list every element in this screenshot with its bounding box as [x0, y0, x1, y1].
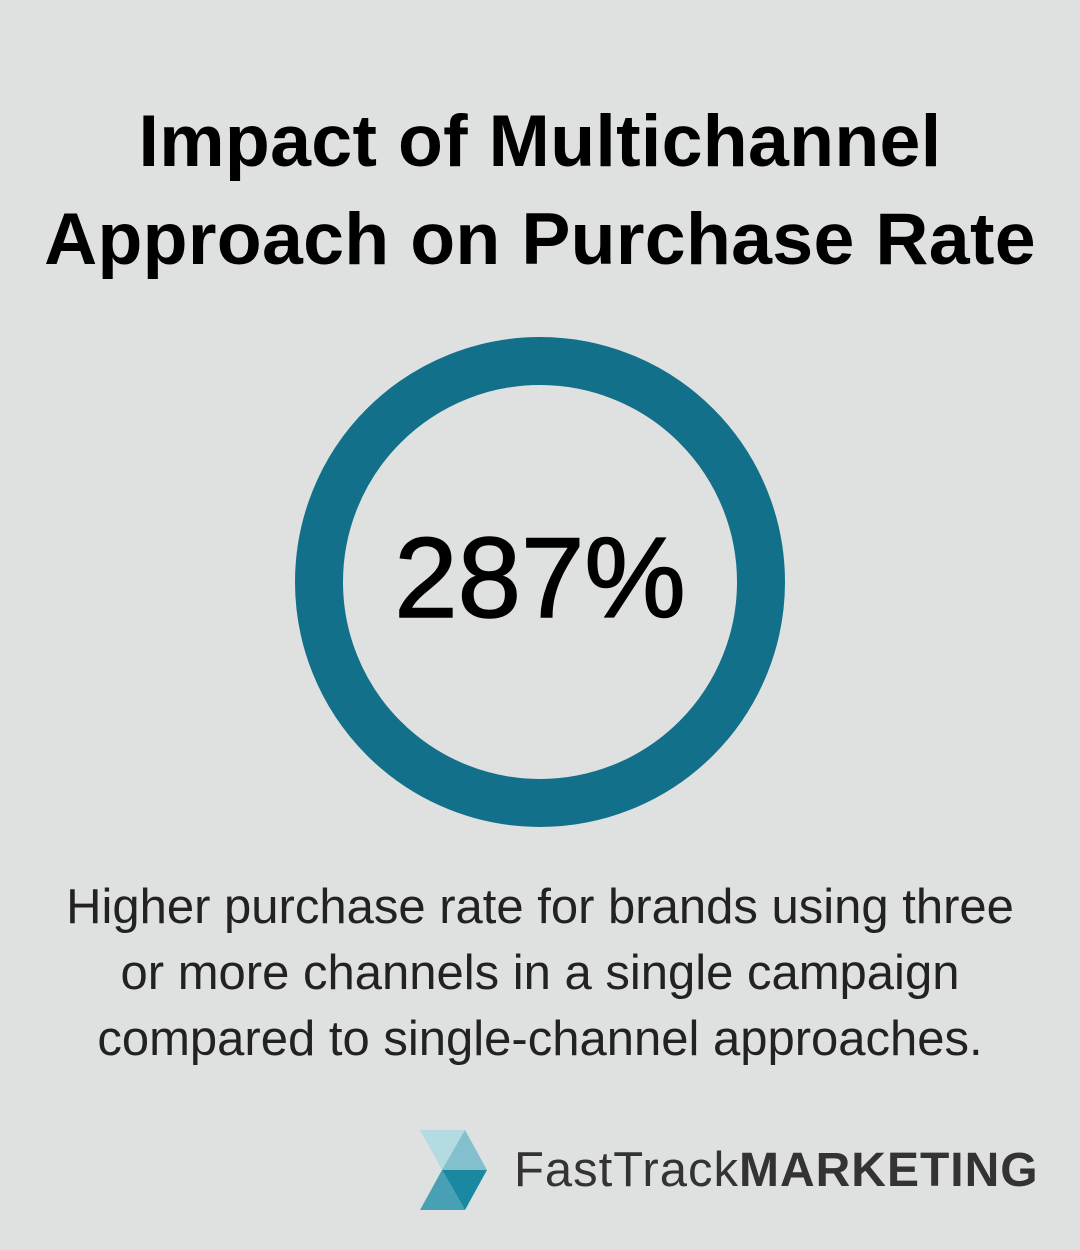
stat value: 287% [394, 515, 686, 642]
icon: logo mark [420, 1130, 487, 1210]
title: Impact of Multichannel [139, 99, 941, 182]
title: Approach on Purchase Rate [44, 197, 1036, 280]
description: Higher purchase rate for brands using three [66, 880, 1014, 934]
description: compared to single-channel approaches. [97, 1012, 983, 1066]
logo text: FastTrackMARKETING [514, 1143, 1039, 1197]
logo [420, 1130, 1039, 1210]
description: or more channels in a single campaign [121, 946, 959, 1000]
description [66, 880, 1014, 1066]
title [44, 99, 1036, 280]
